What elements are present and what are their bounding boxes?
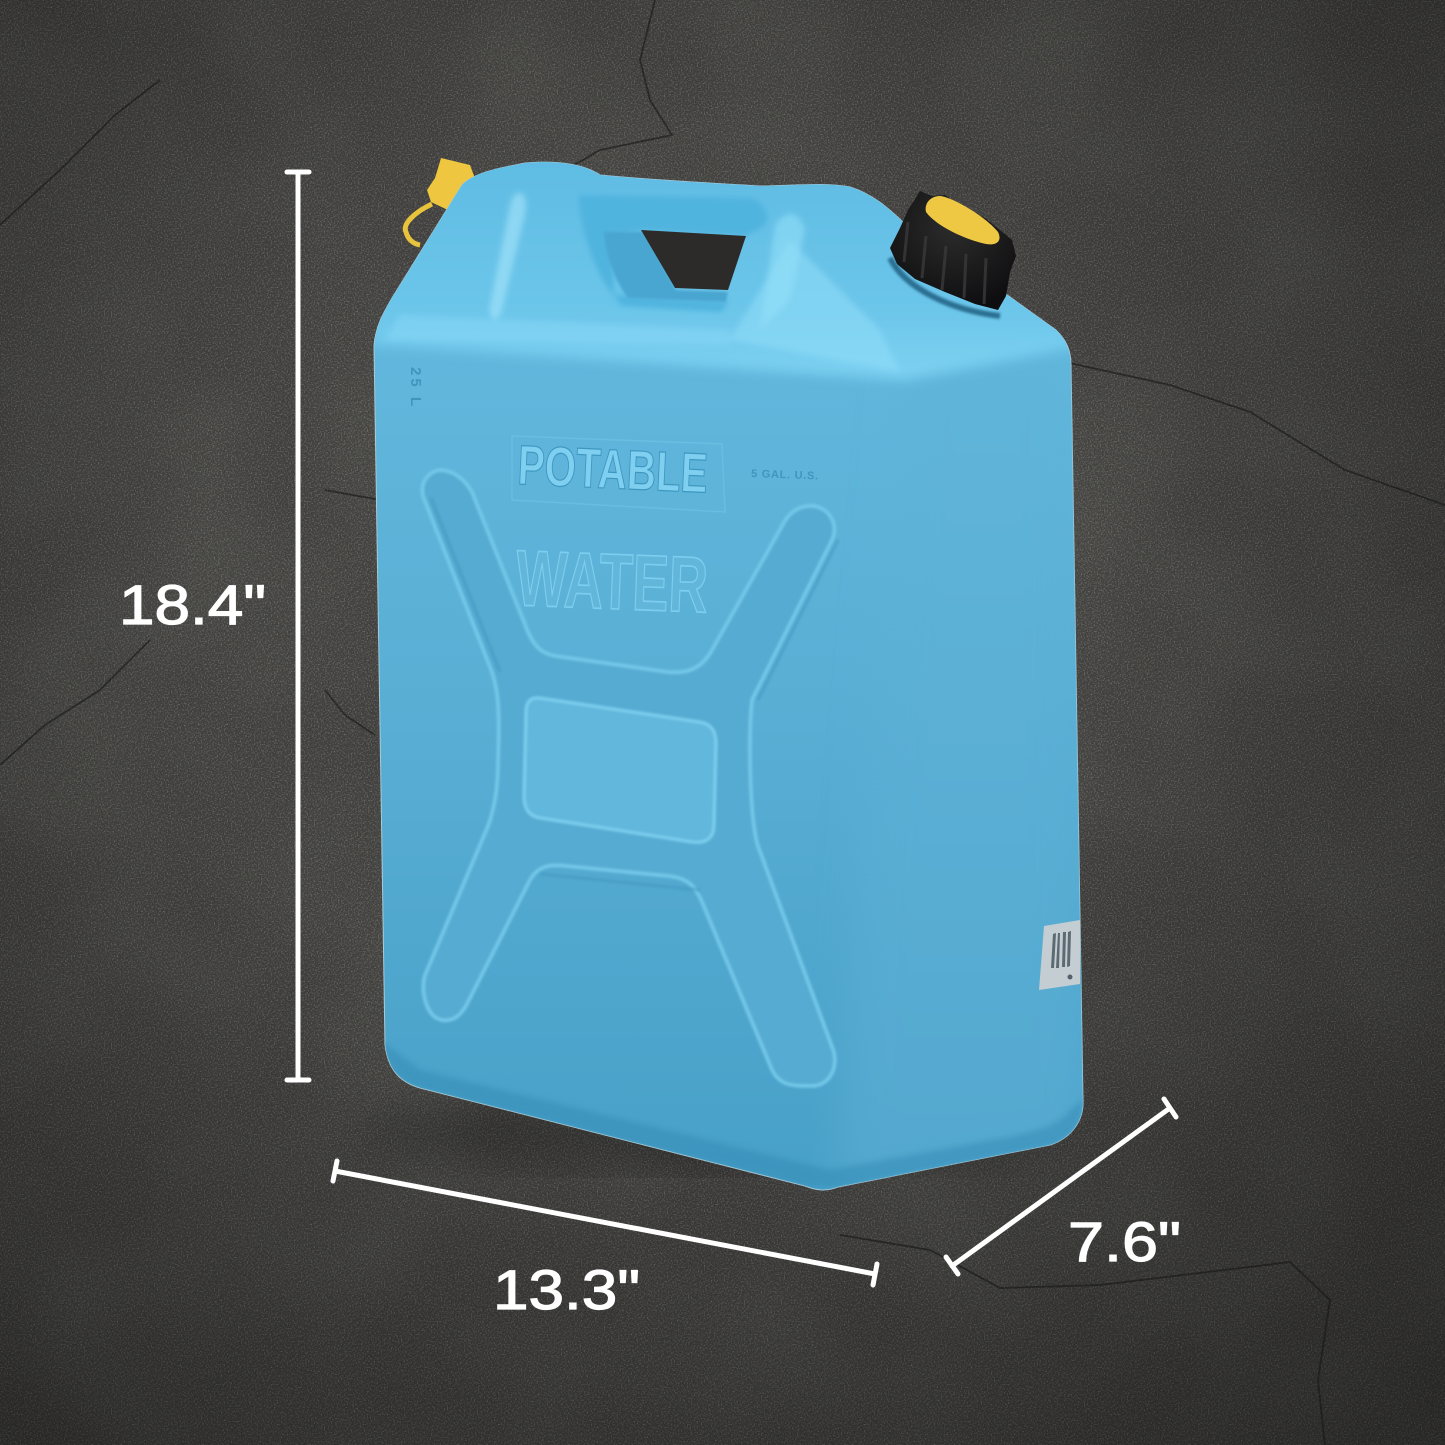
center recessed panel — [524, 698, 716, 842]
cap neck ring — [890, 258, 1000, 316]
barcode sticker — [1039, 920, 1080, 990]
jerrycan — [360, 150, 1090, 1190]
embossed X panel — [422, 470, 838, 1086]
can body silhouette — [374, 162, 1083, 1190]
dimension: width — [333, 1161, 877, 1321]
text: POTABLE: POTABLE — [516, 433, 709, 505]
dimension: depth — [946, 1099, 1181, 1274]
yellow spout strap — [405, 204, 432, 245]
depth label: 7.6" — [1068, 1210, 1181, 1273]
side face — [838, 345, 1090, 1190]
black cap — [890, 191, 1016, 310]
yellow spout cap — [427, 158, 476, 212]
text: WATER: WATER — [514, 534, 710, 630]
bottom edge shading — [380, 1040, 1083, 1187]
text: capacity mark: 5 GAL. U.S. — [751, 468, 818, 482]
shadow under can — [360, 1090, 1040, 1170]
body soft shading — [370, 150, 1090, 1190]
shoulder top face — [370, 150, 1075, 380]
height label: 18.4" — [119, 573, 266, 636]
handle — [578, 195, 767, 312]
yellow cap top — [926, 196, 1000, 244]
text: side mold mark: 25 L — [407, 367, 424, 409]
potable label frame — [512, 436, 725, 512]
handle opening — [641, 230, 746, 290]
cap ribs — [904, 222, 986, 304]
width label: 13.3" — [493, 1258, 640, 1321]
shoulder soft highlights — [385, 193, 900, 372]
dimension: height — [119, 172, 309, 1080]
